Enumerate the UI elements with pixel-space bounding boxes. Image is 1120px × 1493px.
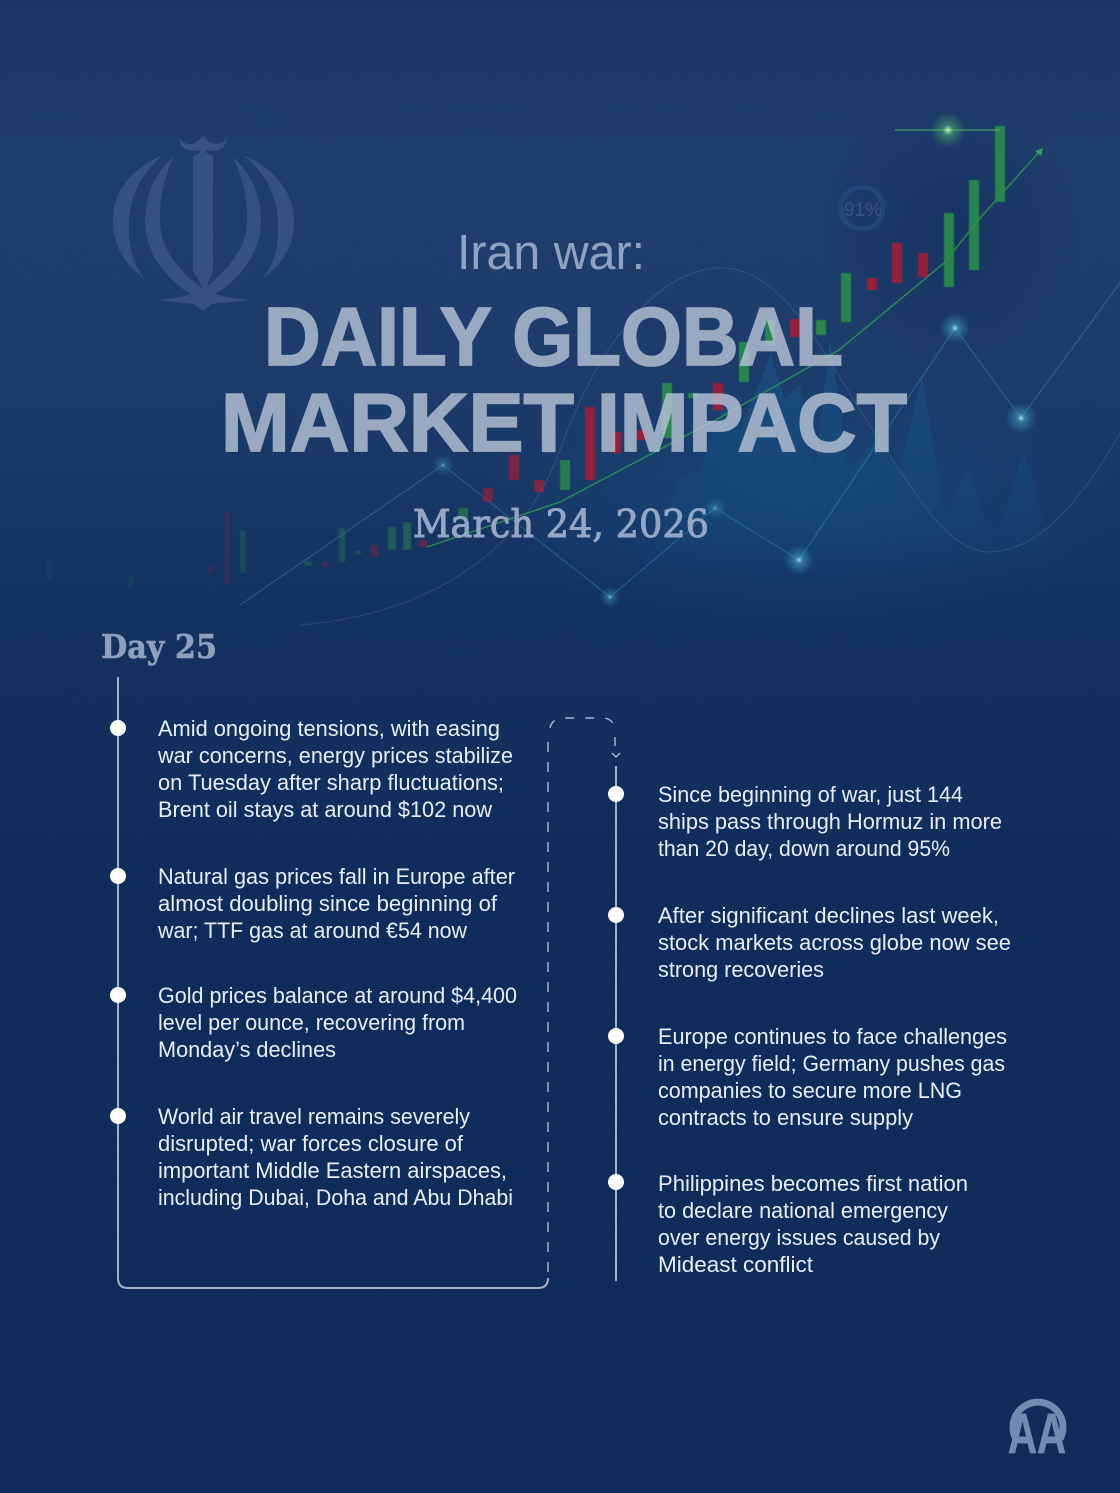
title block: [221, 226, 907, 546]
bullet 4: [110, 1104, 513, 1210]
curved line: [300, 268, 1120, 625]
glowing network nodes: [432, 313, 1037, 608]
emblem of Iran watermark: [113, 136, 294, 311]
bullet 8: Mideast conflict: [658, 1252, 813, 1277]
bullet 6: stock markets across globe now see: [658, 930, 1011, 955]
bullet 3: Monday’s declines: [158, 1037, 336, 1062]
bullet 4: important Middle Eastern airspaces,: [158, 1158, 507, 1183]
network lines: [240, 283, 1120, 605]
date: March 24, 2026: [413, 502, 709, 546]
bullet 7: companies to secure more LNG: [658, 1078, 962, 1103]
bullet 5: ships pass through Hormuz in more: [658, 809, 1002, 834]
91% ring: [841, 187, 883, 229]
bullet 6: strong recoveries: [658, 957, 824, 982]
AA logo: AA: [1008, 1402, 1066, 1466]
bullet 5: than 20 day, down around 95%: [658, 836, 950, 861]
trend arrow: [427, 151, 1040, 547]
bullet 4: World air travel remains severely: [158, 1104, 470, 1129]
star glow: [895, 112, 1000, 148]
bullet 2: [110, 864, 515, 943]
bullet 4: including Dubai, Doha and Abu Dhabi: [158, 1185, 513, 1210]
bullet 3: level per ounce, recovering from: [158, 1010, 465, 1035]
bullet 7: contracts to ensure supply: [658, 1105, 913, 1130]
title line 2: MARKET IMPACT: [221, 376, 907, 469]
bullet 5: [608, 782, 1002, 861]
mountain area chart: [640, 340, 1075, 575]
bullet 4: disrupted; war forces closure of: [158, 1131, 464, 1156]
bullet 1: Brent oil stays at around $102 now: [158, 797, 492, 822]
bullet 6: [608, 903, 1011, 982]
bullet 1: Amid ongoing tensions, with easing: [158, 716, 500, 741]
bullet 7: Europe continues to face challenges: [658, 1024, 1007, 1049]
bullet 6: After significant declines last week,: [658, 903, 999, 928]
candlesticks: [46, 126, 1005, 587]
arrow head: [1035, 148, 1043, 156]
market chart background: [46, 112, 1120, 625]
bullet 8: to declare national emergency: [658, 1198, 948, 1223]
bullet 8: over energy issues caused by: [658, 1225, 940, 1250]
bullet 3: Gold prices balance at around $4,400: [158, 983, 517, 1008]
bullet 1: war concerns, energy prices stabilize: [157, 743, 513, 768]
right column bullets: [608, 782, 1011, 1277]
overline: Iran war:: [457, 226, 645, 280]
bullet 1: on Tuesday after sharp fluctuations;: [158, 770, 504, 795]
bullet 2: Natural gas prices fall in Europe after: [158, 864, 515, 889]
left column bullets: [110, 716, 517, 1210]
heading: Day 25: Day 25: [101, 627, 217, 666]
bullet 7: [608, 1024, 1007, 1130]
bullet 2: war; TTF gas at around €54 now: [157, 918, 467, 943]
bullet 3: [110, 983, 517, 1062]
bullet 7: in energy field; Germany pushes gas: [658, 1051, 1005, 1076]
title line 1: DAILY GLOBAL: [264, 290, 843, 383]
91% ring: 91%: [844, 200, 882, 221]
bullet 2: almost doubling since beginning of: [158, 891, 498, 916]
bullet 5: Since beginning of war, just 144: [658, 782, 963, 807]
bullet 8: Philippines becomes first nation: [658, 1171, 968, 1196]
bullet 8: [608, 1171, 968, 1277]
bullet 1: [110, 716, 513, 822]
timeline connector: [118, 677, 620, 1288]
